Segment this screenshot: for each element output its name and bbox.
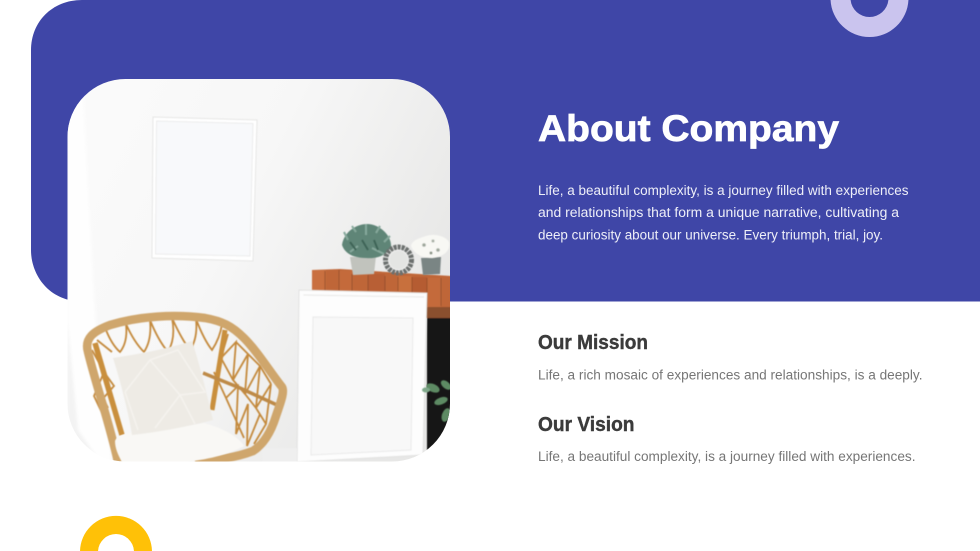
mission block xyxy=(538,332,922,382)
hanging frame xyxy=(152,117,257,261)
blue header panel xyxy=(31,0,980,302)
seat cushion xyxy=(114,431,243,462)
decorative lavender ring xyxy=(831,0,908,37)
vision block xyxy=(538,414,916,464)
mission text: Life, a rich mosaic of experiences and relationships, is a deeply. xyxy=(538,368,922,382)
intro paragraph: Life, a beautiful complexity, is a journey filled with experiences xyxy=(538,183,909,198)
green leaves xyxy=(422,380,450,422)
decorative yellow ring xyxy=(80,516,152,551)
leaning frame xyxy=(297,290,427,462)
mission heading: Our Mission xyxy=(538,332,648,354)
title: About Company xyxy=(538,108,839,149)
vision heading: Our Vision xyxy=(538,414,634,436)
plants and clock xyxy=(342,224,449,275)
wicker chair xyxy=(87,316,297,462)
brick shelf xyxy=(312,269,451,462)
pillow xyxy=(113,341,213,435)
intro paragraph: and relationships that form a unique narrative, cultivating a xyxy=(538,205,900,220)
intro paragraph xyxy=(538,183,909,242)
photo: room with chair and frames xyxy=(67,79,453,462)
vision text: Life, a beautiful complexity, is a journey filled with experiences. xyxy=(538,449,916,464)
intro paragraph: deep curiosity about our universe. Every triumph, trial, joy. xyxy=(538,228,883,242)
